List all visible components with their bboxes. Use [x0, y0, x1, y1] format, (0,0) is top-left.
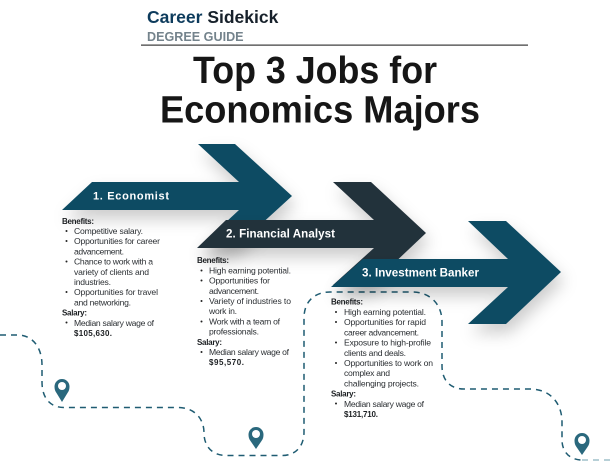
text: economist details: variety of clients and — [74, 267, 149, 277]
text: financial analyst details: professionals. — [209, 327, 259, 337]
text: investment banker details: Benefits: — [331, 298, 363, 306]
text: financial analyst details — [197, 256, 291, 367]
text: investment banker details: clients and deals. — [344, 348, 406, 358]
header: brand — [147, 7, 279, 44]
text: economist details: and networking. — [74, 297, 131, 307]
arrow 2 label: 2. Financial Analyst — [226, 228, 335, 240]
title — [160, 50, 480, 132]
text: economist details: Chance to work with a — [74, 257, 153, 267]
title: Economics Majors — [160, 90, 480, 132]
text: financial analyst details: advancement. — [209, 286, 259, 296]
header: brand: DEGREE GUIDE — [147, 30, 244, 44]
icon: map pin 2 — [248, 427, 264, 449]
text: financial analyst details: Opportunities for — [209, 276, 270, 286]
text: financial analyst details: High earning potential. — [209, 265, 291, 275]
arrow 1 label: 1. Economist — [93, 190, 169, 202]
text: financial analyst details: Median salary wage of — [209, 347, 290, 357]
text: economist details: Salary: — [62, 309, 87, 318]
text: investment banker details: career advancement. — [344, 327, 419, 337]
text: financial analyst details: Work with a team of — [209, 316, 281, 326]
text: investment banker details: High earning potential. — [344, 307, 426, 317]
text: financial analyst details: $95,570. — [209, 358, 244, 367]
header: brand: Career Sidekick — [147, 7, 279, 27]
text: economist details: Opportunities for career — [74, 236, 160, 246]
text: investment banker details: Salary: — [331, 390, 356, 399]
text: investment banker details — [331, 298, 433, 419]
text: investment banker details: Opportunities to work on — [344, 358, 433, 368]
text: economist details: Median salary wage of — [74, 318, 155, 328]
text: financial analyst details: work in. — [208, 306, 237, 316]
text: investment banker details: $131,710. — [344, 410, 378, 419]
text: financial analyst details: Variety of industries to — [209, 296, 291, 306]
arrow 2 — [197, 182, 426, 285]
text: financial analyst details: Salary: — [197, 338, 222, 347]
dashed route line — [0, 292, 615, 460]
text: economist details — [62, 217, 160, 338]
text: economist details: Benefits: — [62, 217, 94, 226]
text: economist details: Opportunities for travel — [74, 287, 158, 297]
text: financial analyst details: Benefits: — [197, 256, 229, 265]
text: investment banker details: Median salary wage of — [344, 399, 425, 409]
arrow 3 — [331, 221, 561, 324]
text: investment banker details: Opportunities for rapid — [344, 317, 426, 327]
icon: map pin 1 — [54, 379, 70, 402]
text: investment banker details: Exposure to high-profile — [344, 338, 431, 348]
arrow 3 label: 3. Investment Banker — [362, 266, 479, 280]
icon: map pin 3 — [574, 433, 590, 455]
text: economist details: industries. — [74, 277, 111, 287]
text: economist details: $105,630. — [74, 329, 112, 338]
text: economist details: advancement. — [74, 246, 124, 256]
title: Top 3 Jobs for — [193, 50, 437, 92]
text: investment banker details: challenging projects. — [344, 378, 419, 388]
arrow 1 — [62, 144, 292, 248]
text: investment banker details: complex and — [344, 368, 390, 378]
text: economist details: Competitive salary. — [74, 226, 143, 236]
